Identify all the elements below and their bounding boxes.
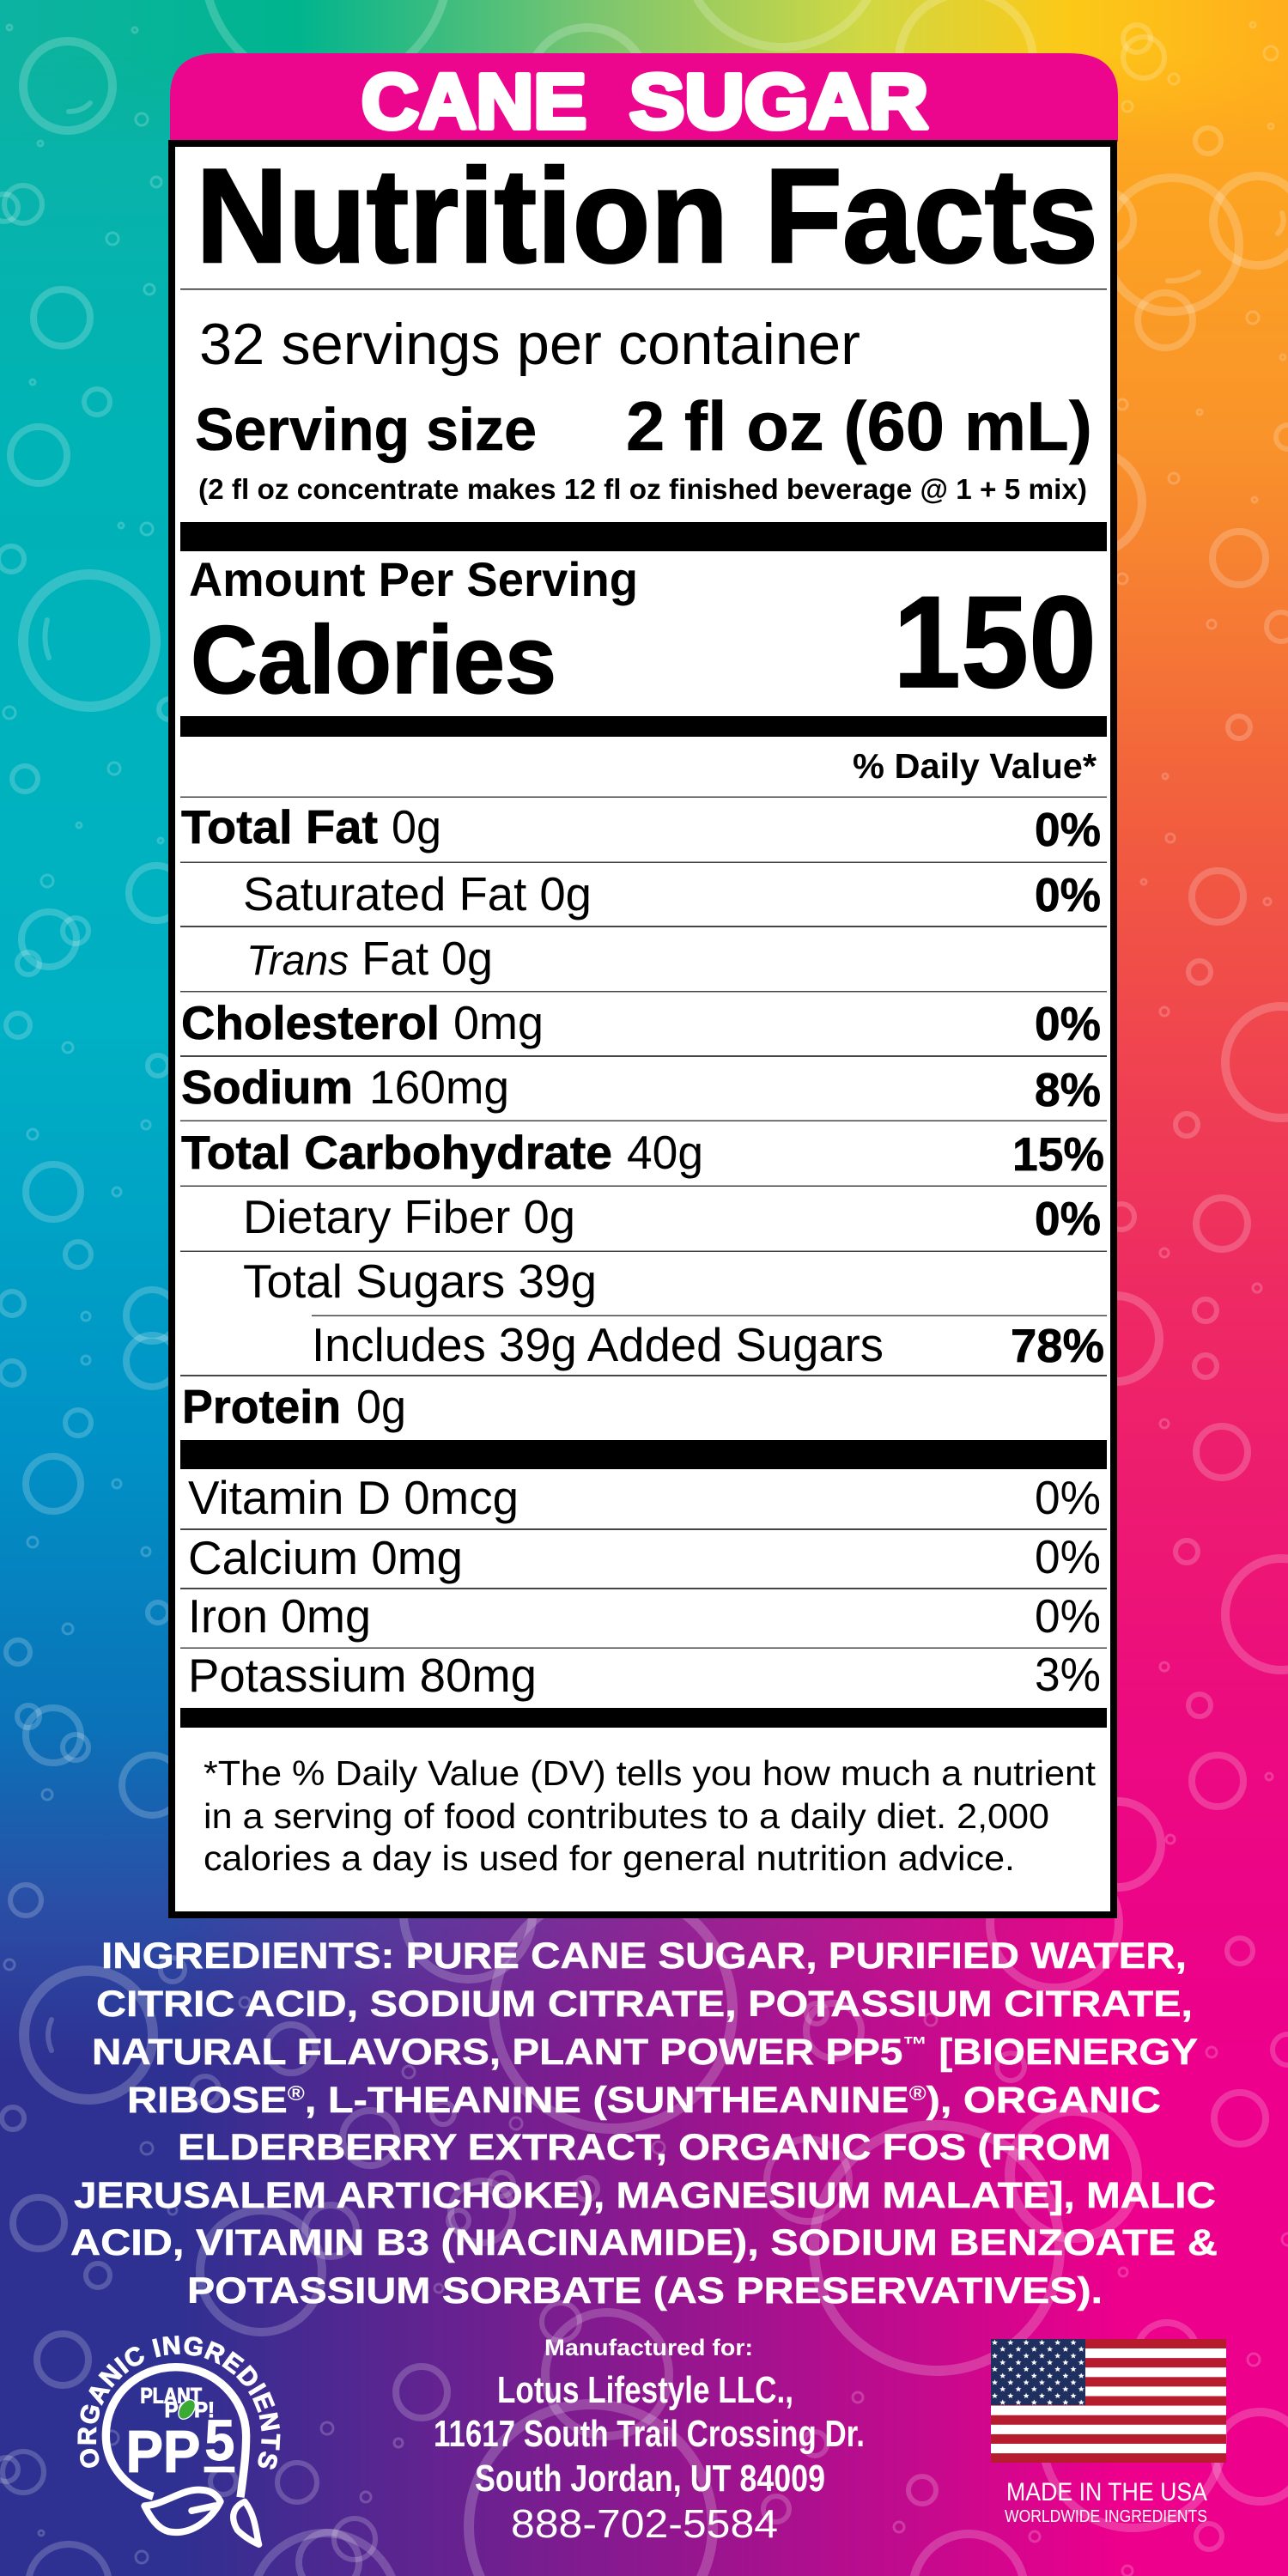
manufacturer block: South Jordan, UT 84009 <box>475 2458 825 2500</box>
ingredients text: ™ <box>902 2032 927 2057</box>
manufacturer block: 11617 South Trail Crossing Dr. <box>434 2413 865 2455</box>
row: total fat: Total Fat <box>181 800 378 854</box>
row: potassium <box>188 1648 1101 1702</box>
row: iron <box>188 1589 1101 1643</box>
footnote: *The % Daily Value (DV) tells you how much a nutrient <box>204 1753 1097 1793</box>
header tab: cane sugar <box>170 53 1118 145</box>
ingredients text: ), ORGANIC <box>927 2080 1161 2121</box>
row: cholesterol <box>181 996 1101 1050</box>
row: saturated fat: Saturated Fat 0g <box>243 867 592 920</box>
ingredients text: ® <box>909 2082 927 2105</box>
icon: usa flag <box>991 2339 1226 2463</box>
nutrition facts panel <box>172 142 1114 1915</box>
ingredients text: POTASSIUM SORBATE (AS PRESERVATIVES). <box>187 2270 1103 2312</box>
logo: plant pop pp5 organic ingredients: PP <box>126 2419 200 2484</box>
ingredients text: INGREDIENTS: PURE CANE SUGAR, PURIFIED WATER, <box>101 1935 1187 1977</box>
manufacturer block: Lotus Lifestyle LLC., <box>497 2369 793 2411</box>
row: sodium: 160mg <box>369 1060 509 1114</box>
row: potassium: 3% <box>1035 1648 1101 1701</box>
row: saturated fat <box>243 867 1101 921</box>
logo: plant pop pp5 organic ingredients: ORGANIC INGREDIENTS <box>77 2336 280 2470</box>
logo: plant pop pp5 organic ingredients: PLANT <box>140 2384 202 2408</box>
logo: plant pop pp5 organic ingredients: 5 <box>204 2409 234 2473</box>
row: cholesterol: 0% <box>1035 997 1101 1050</box>
row: total fat: 0% <box>1035 803 1101 856</box>
row: iron: Iron 0mg <box>188 1589 371 1643</box>
footnote: calories a day is used for general nutrition advice. <box>204 1838 1015 1878</box>
serving size <box>195 388 1092 465</box>
ingredients text: RIBOSE <box>127 2080 269 2121</box>
servings per container: 32 servings per container <box>199 312 860 377</box>
ingredients text: NATURAL FLAVORS, PLANT POWER PP5 <box>92 2032 824 2073</box>
logo: plant pop pp5 organic ingredients: POP! <box>165 2398 215 2422</box>
logo: plant pop pp5 organic ingredients <box>77 2336 280 2548</box>
footnote: in a serving of food contributes to a daily diet. 2,000 <box>204 1796 1049 1836</box>
row: vitamin d <box>188 1471 1101 1524</box>
made in the usa label: WORLDWIDE INGREDIENTS <box>1005 2507 1207 2526</box>
manufacturer block <box>434 2335 865 2546</box>
ingredients text: CITRIC ACID, SODIUM CITRATE, POTASSIUM CITRATE, <box>96 1984 1193 2025</box>
row: calcium: Calcium 0mg <box>188 1531 463 1584</box>
row: vitamin d: 0% <box>1035 1471 1101 1524</box>
daily value header: % Daily Value* <box>853 746 1097 786</box>
ingredients text: , L-THEANINE (SUNTHEANINE <box>305 2080 909 2121</box>
row: total carbohydrate <box>181 1126 1104 1181</box>
row: trans fat: Trans Fat 0g <box>246 932 493 985</box>
footnote <box>204 1753 1097 1878</box>
row: total sugars: Total Sugars 39g <box>243 1255 597 1308</box>
row: dietary fiber <box>243 1190 1101 1245</box>
manufacturer block: Manufactured for: <box>544 2335 753 2360</box>
row: total carbohydrate: 40g <box>627 1126 703 1179</box>
serving note: (2 fl oz concentrate makes 12 fl oz finished beverage @ 1 + 5 mix) <box>198 473 1087 505</box>
ingredients text: [BIOENERGY <box>927 2032 1198 2073</box>
ingredients text: ACID, VITAMIN B3 (NIACINAMIDE), SODIUM BENZOATE & <box>70 2222 1218 2263</box>
ingredients text: ® <box>288 2082 305 2105</box>
row: total fat: 0g <box>392 800 441 854</box>
calories: Calories <box>191 606 556 714</box>
row: added sugars: 78% <box>1011 1319 1104 1372</box>
made in the usa label: MADE IN THE USA <box>1006 2478 1207 2506</box>
header tab: cane sugar: SUGAR <box>629 59 928 145</box>
ingredients text <box>70 1935 1218 2312</box>
row: protein: Protein <box>182 1380 341 1433</box>
header tab: cane sugar: CANE <box>361 59 586 145</box>
row: calcium: 0% <box>1035 1530 1101 1583</box>
row: iron: 0% <box>1035 1589 1101 1643</box>
row: added sugars: Includes 39g Added Sugars <box>312 1318 884 1371</box>
row: total carbohydrate: Total Carbohydrate <box>181 1126 612 1179</box>
row: vitamin d: Vitamin D 0mcg <box>188 1471 519 1524</box>
row: sodium <box>181 1060 1101 1116</box>
serving size: Serving size <box>195 396 537 463</box>
made in the usa label <box>1005 2478 1207 2526</box>
row: total fat <box>181 800 1101 856</box>
row: cholesterol: Cholesterol <box>181 996 440 1049</box>
serving size: 2 fl oz (60 mL) <box>626 388 1092 465</box>
row: saturated fat: 0% <box>1035 868 1101 921</box>
row: sodium: 8% <box>1035 1063 1101 1116</box>
ingredients text: ELDERBERRY EXTRACT, ORGANIC FOS (FROM <box>178 2127 1111 2168</box>
calories: 150 <box>893 569 1097 715</box>
calories <box>191 569 1097 715</box>
row: cholesterol: 0mg <box>453 996 544 1049</box>
row: dietary fiber: 0% <box>1035 1192 1101 1245</box>
row: dietary fiber: Dietary Fiber 0g <box>243 1190 575 1243</box>
row: protein: 0g <box>356 1380 406 1433</box>
amount per serving: Amount Per Serving <box>189 552 638 606</box>
row: calcium <box>188 1530 1101 1584</box>
heading: nutrition facts: Nutrition Facts <box>196 142 1098 291</box>
ingredients text: JERUSALEM ARTICHOKE), MAGNESIUM MALATE], MALIC <box>74 2175 1216 2216</box>
manufacturer block: 888-702-5584 <box>511 2501 778 2546</box>
row: total carbohydrate: 15% <box>1012 1127 1104 1181</box>
row: potassium: Potassium 80mg <box>188 1649 537 1702</box>
row: sodium: Sodium <box>181 1060 353 1114</box>
